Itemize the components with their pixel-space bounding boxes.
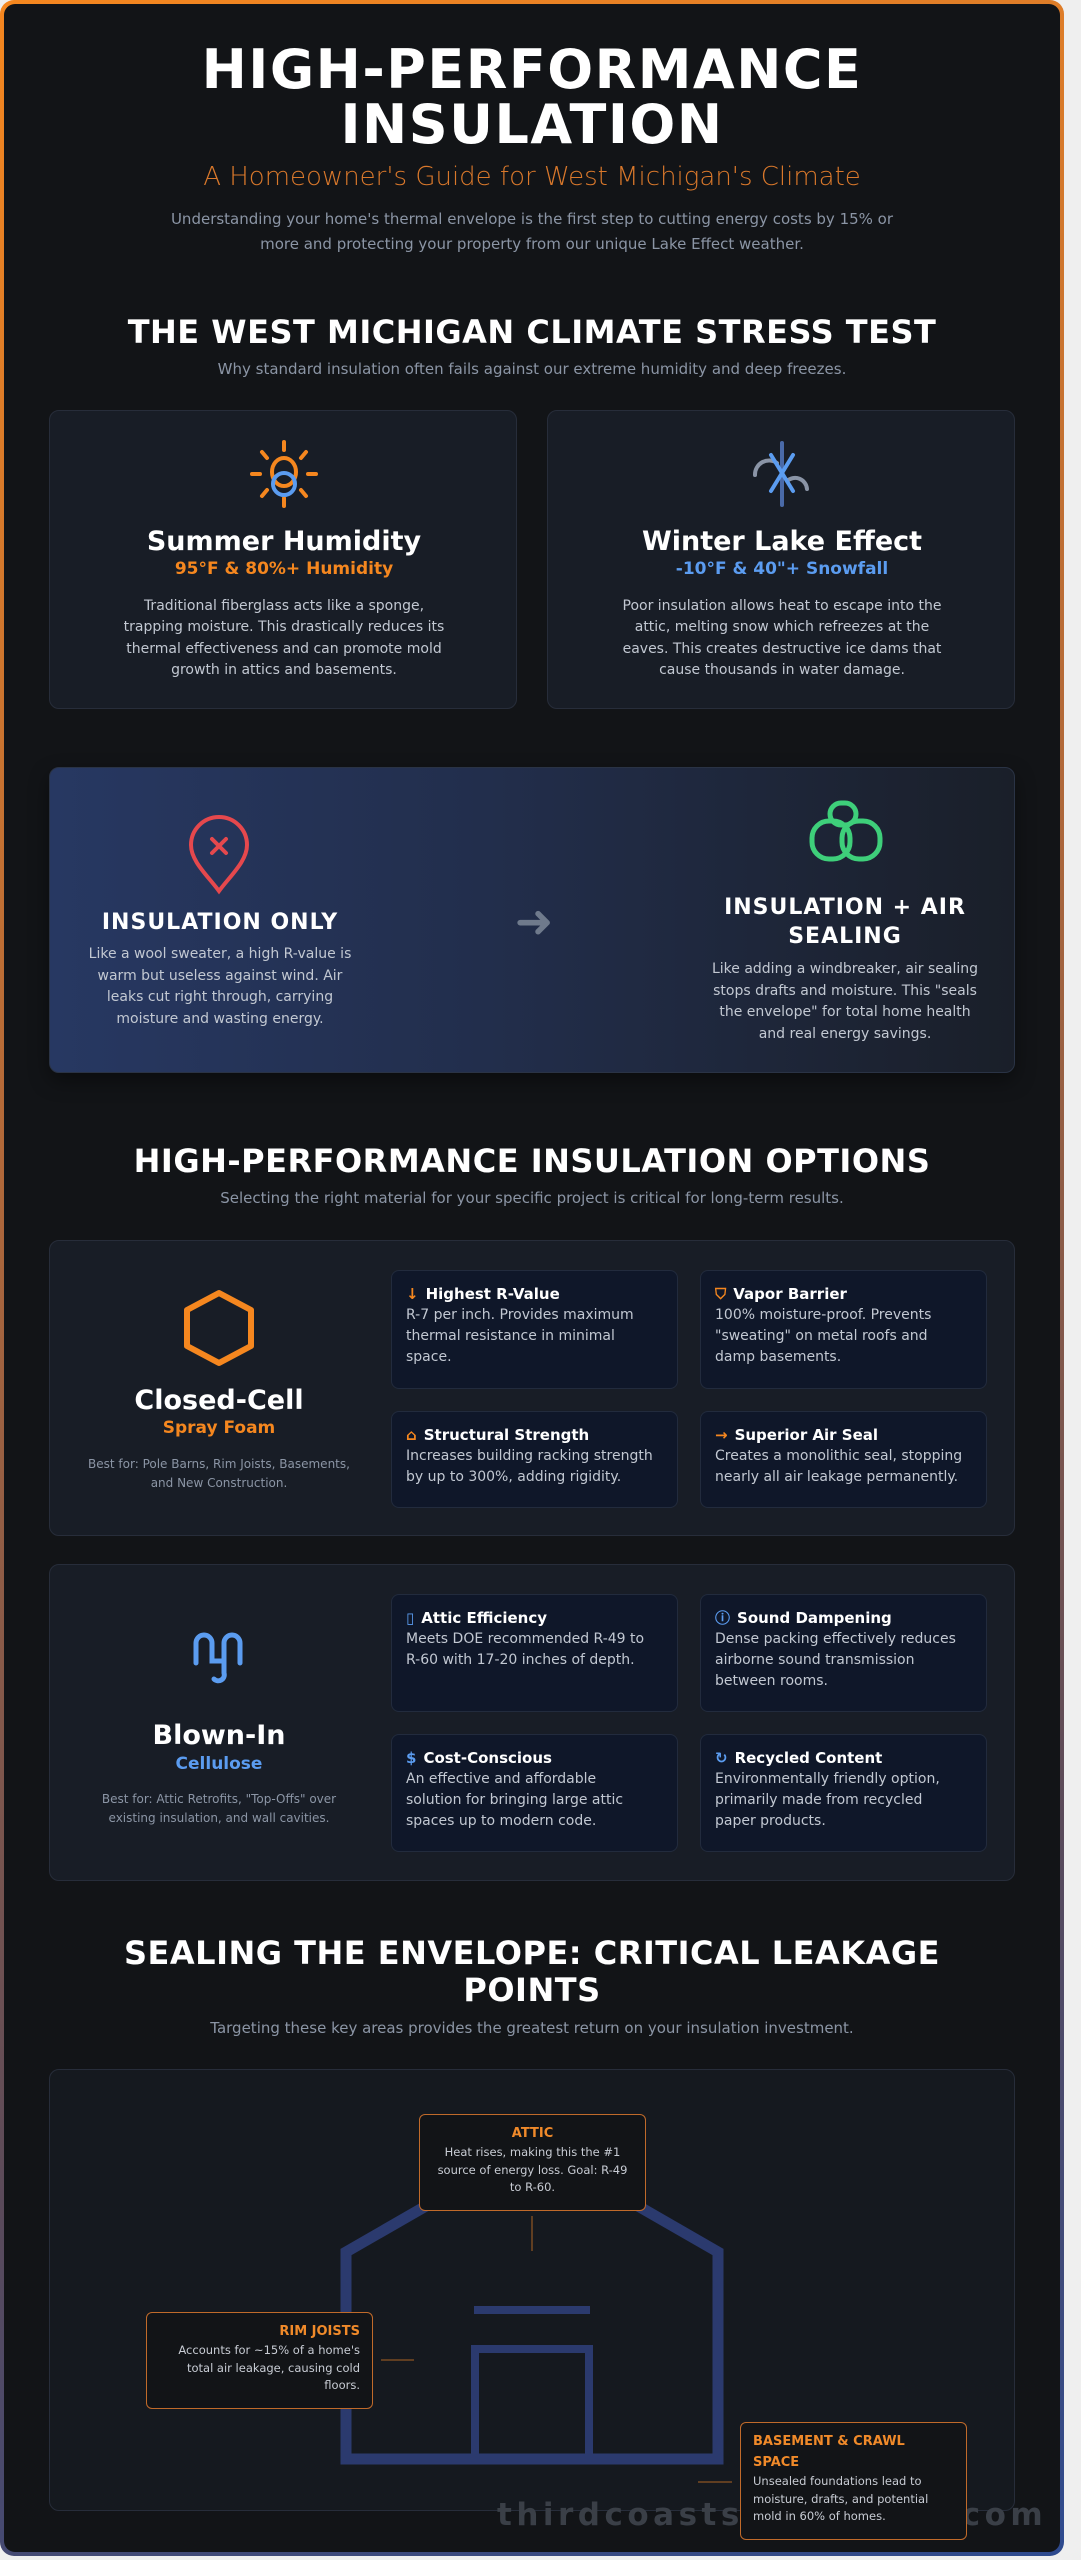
heading: insulation + air sealing: INSULATION + AIR SEALING bbox=[724, 895, 966, 948]
feature: recycled content: Environmentally friendly option, primarily made from recycled paper products. bbox=[715, 1771, 940, 1829]
text: air sealing: Like adding a windbreaker, air sealing stops drafts and moisture. This "seals the envelope" for total home health and real energy savings. bbox=[712, 961, 978, 1042]
callout: rim joists bbox=[146, 2312, 373, 2409]
section heading: sealing the envelope: SEALING THE ENVELOPE: CRITICAL LEAKAGE POINTS bbox=[124, 1934, 940, 2009]
feature: structural strength: Increases building racking strength by up to 300%, adding rigidity. bbox=[406, 1448, 653, 1485]
icon: snow bbox=[753, 441, 809, 507]
feature: recycled content: Recycled Content bbox=[735, 1749, 882, 1767]
subtitle: A Homeowner's Guide for West Michigan's Climate bbox=[203, 162, 861, 192]
section subtitle: Why standard insulation often fails against our extreme humidity and deep freezes. bbox=[218, 360, 846, 378]
icon: hexagon bbox=[184, 1290, 254, 1366]
panel: summer humidity bbox=[49, 410, 517, 709]
stat: -10°F & 40"+ Snowfall bbox=[676, 559, 888, 579]
title bbox=[202, 38, 862, 156]
panel: winter lake effect bbox=[547, 410, 1015, 709]
heading: Winter Lake Effect bbox=[642, 526, 922, 557]
feature: attic efficiency bbox=[391, 1594, 678, 1712]
feature: superior air seal bbox=[700, 1411, 987, 1508]
panel: blown-in cellulose bbox=[49, 1564, 1015, 1881]
intro text: Understanding your home's thermal envelope is the first step to cutting energy costs by 15% or more and protecting your property from our unique Lake Effect weather. bbox=[171, 210, 893, 253]
subheading: Spray Foam bbox=[163, 1418, 275, 1438]
title: HIGH-PERFORMANCE bbox=[202, 38, 862, 101]
callout: rim joists: Accounts for ~15% of a home's total air leakage, causing cold floors. bbox=[178, 2343, 360, 2392]
best for: Best for: Pole Barns, Rim Joists, Basements, and New Construction. bbox=[88, 1457, 350, 1490]
callout: attic: Heat rises, making this the #1 source of energy loss. Goal: R-49 to R-60. bbox=[438, 2145, 627, 2194]
feature: highest r-value: Highest R-Value bbox=[426, 1285, 560, 1303]
feature: superior air seal: Creates a monolithic seal, stopping nearly all air leakage permanently. bbox=[715, 1448, 962, 1485]
feature: sound dampening: Dense packing effectively reduces airborne sound transmission between rooms. bbox=[715, 1631, 956, 1689]
watermark: thirdcoastsprayfoam.com bbox=[497, 2497, 1047, 2533]
heading: Summer Humidity bbox=[147, 526, 421, 557]
callout: basement: BASEMENT & CRAWL SPACE bbox=[753, 2434, 905, 2470]
feature: sound dampening: Sound Dampening bbox=[737, 1609, 892, 1627]
panel: insulation vs air sealing comparison bbox=[49, 767, 1015, 1073]
feature: sound dampening bbox=[700, 1594, 987, 1712]
panel: closed-cell spray foam bbox=[49, 1240, 1015, 1536]
arrow: ➜ bbox=[515, 894, 553, 948]
section heading: climate stress test: THE WEST MICHIGAN CLIMATE STRESS TEST bbox=[128, 313, 936, 351]
callout: rim joists: RIM JOISTS bbox=[279, 2324, 360, 2339]
feature: cost-conscious: $ bbox=[406, 1749, 416, 1767]
heading: Closed-Cell bbox=[134, 1385, 304, 1416]
feature: highest r-value: ↓ bbox=[406, 1285, 419, 1303]
feature: recycled content bbox=[700, 1734, 987, 1852]
callout: basement bbox=[740, 2422, 967, 2540]
section subtitle: Selecting the right material for your specific project is critical for long-term results. bbox=[220, 1189, 844, 1207]
text: insulation only: Like a wool sweater, a high R-value is warm but useless against wind. Air leaks cut right through, carrying moisture and wasting energy. bbox=[89, 946, 351, 1026]
feature: attic efficiency: Attic Efficiency bbox=[421, 1609, 547, 1627]
feature: sound dampening: ⓘ bbox=[715, 1609, 730, 1627]
body text: Poor insulation allows heat to escape into the attic, melting snow which refreezes at the eaves. This creates destructive ice dams that cause thousands in water damage. bbox=[623, 598, 941, 678]
feature: highest r-value: R-7 per inch. Provides maximum thermal resistance in minimal space. bbox=[406, 1307, 634, 1365]
feature: vapor barrier: Vapor Barrier bbox=[733, 1285, 847, 1303]
best for: Best for: Attic Retrofits, "Top-Offs" over existing insulation, and wall cavities. bbox=[102, 1792, 336, 1825]
feature: cost-conscious: An effective and affordable solution for bringing large attic spaces up to modern code. bbox=[406, 1771, 623, 1829]
icon: sun humidity bbox=[250, 440, 318, 508]
feature: attic efficiency: ▯ bbox=[406, 1609, 414, 1627]
feature: structural strength bbox=[391, 1411, 678, 1508]
section subtitle: Targeting these key areas provides the greatest return on your insulation investment. bbox=[210, 2019, 854, 2037]
feature: attic efficiency: Meets DOE recommended R-49 to R-60 with 17-20 inches of depth. bbox=[406, 1631, 644, 1668]
heading: insulation only: INSULATION ONLY bbox=[102, 910, 338, 935]
icon: green shield cluster bbox=[810, 800, 882, 862]
feature: vapor barrier: 100% moisture-proof. Prevents "sweating" on metal roofs and damp basements. bbox=[715, 1307, 931, 1365]
callout: basement: Unsealed foundations lead to moisture, drafts, and potential mold in 60% of homes. bbox=[753, 2474, 928, 2523]
feature: superior air seal: Superior Air Seal bbox=[735, 1426, 878, 1444]
panel: leakage diagram bbox=[49, 2069, 1015, 2511]
feature: structural strength: ⌂ bbox=[406, 1426, 417, 1444]
feature: highest r-value bbox=[391, 1270, 678, 1389]
stat: 95°F & 80%+ Humidity bbox=[175, 559, 393, 579]
subheading: Cellulose bbox=[176, 1754, 262, 1774]
heading: Blown-In bbox=[152, 1720, 286, 1751]
section heading: options: HIGH-PERFORMANCE INSULATION OPTIONS bbox=[134, 1142, 930, 1180]
body text: Traditional fiberglass acts like a sponge, trapping moisture. This drastically reduces its thermal effectiveness and can promote mold growth in attics and basements. bbox=[124, 598, 444, 678]
feature: structural strength: Structural Strength bbox=[424, 1426, 589, 1444]
icon: red pin with x bbox=[189, 815, 249, 894]
icon: blown-in bbox=[194, 1632, 242, 1684]
title: INSULATION bbox=[340, 93, 724, 156]
callout: attic: ATTIC bbox=[512, 2126, 553, 2141]
house diagram bbox=[340, 2204, 732, 2483]
feature: cost-conscious bbox=[391, 1734, 678, 1852]
feature: cost-conscious: Cost-Conscious bbox=[423, 1749, 552, 1767]
feature: vapor barrier bbox=[700, 1270, 987, 1389]
feature: vapor barrier: ⛉ bbox=[715, 1285, 726, 1303]
feature: superior air seal: → bbox=[715, 1426, 728, 1444]
feature: recycled content: ↻ bbox=[715, 1749, 728, 1767]
callout: attic bbox=[419, 2114, 646, 2211]
